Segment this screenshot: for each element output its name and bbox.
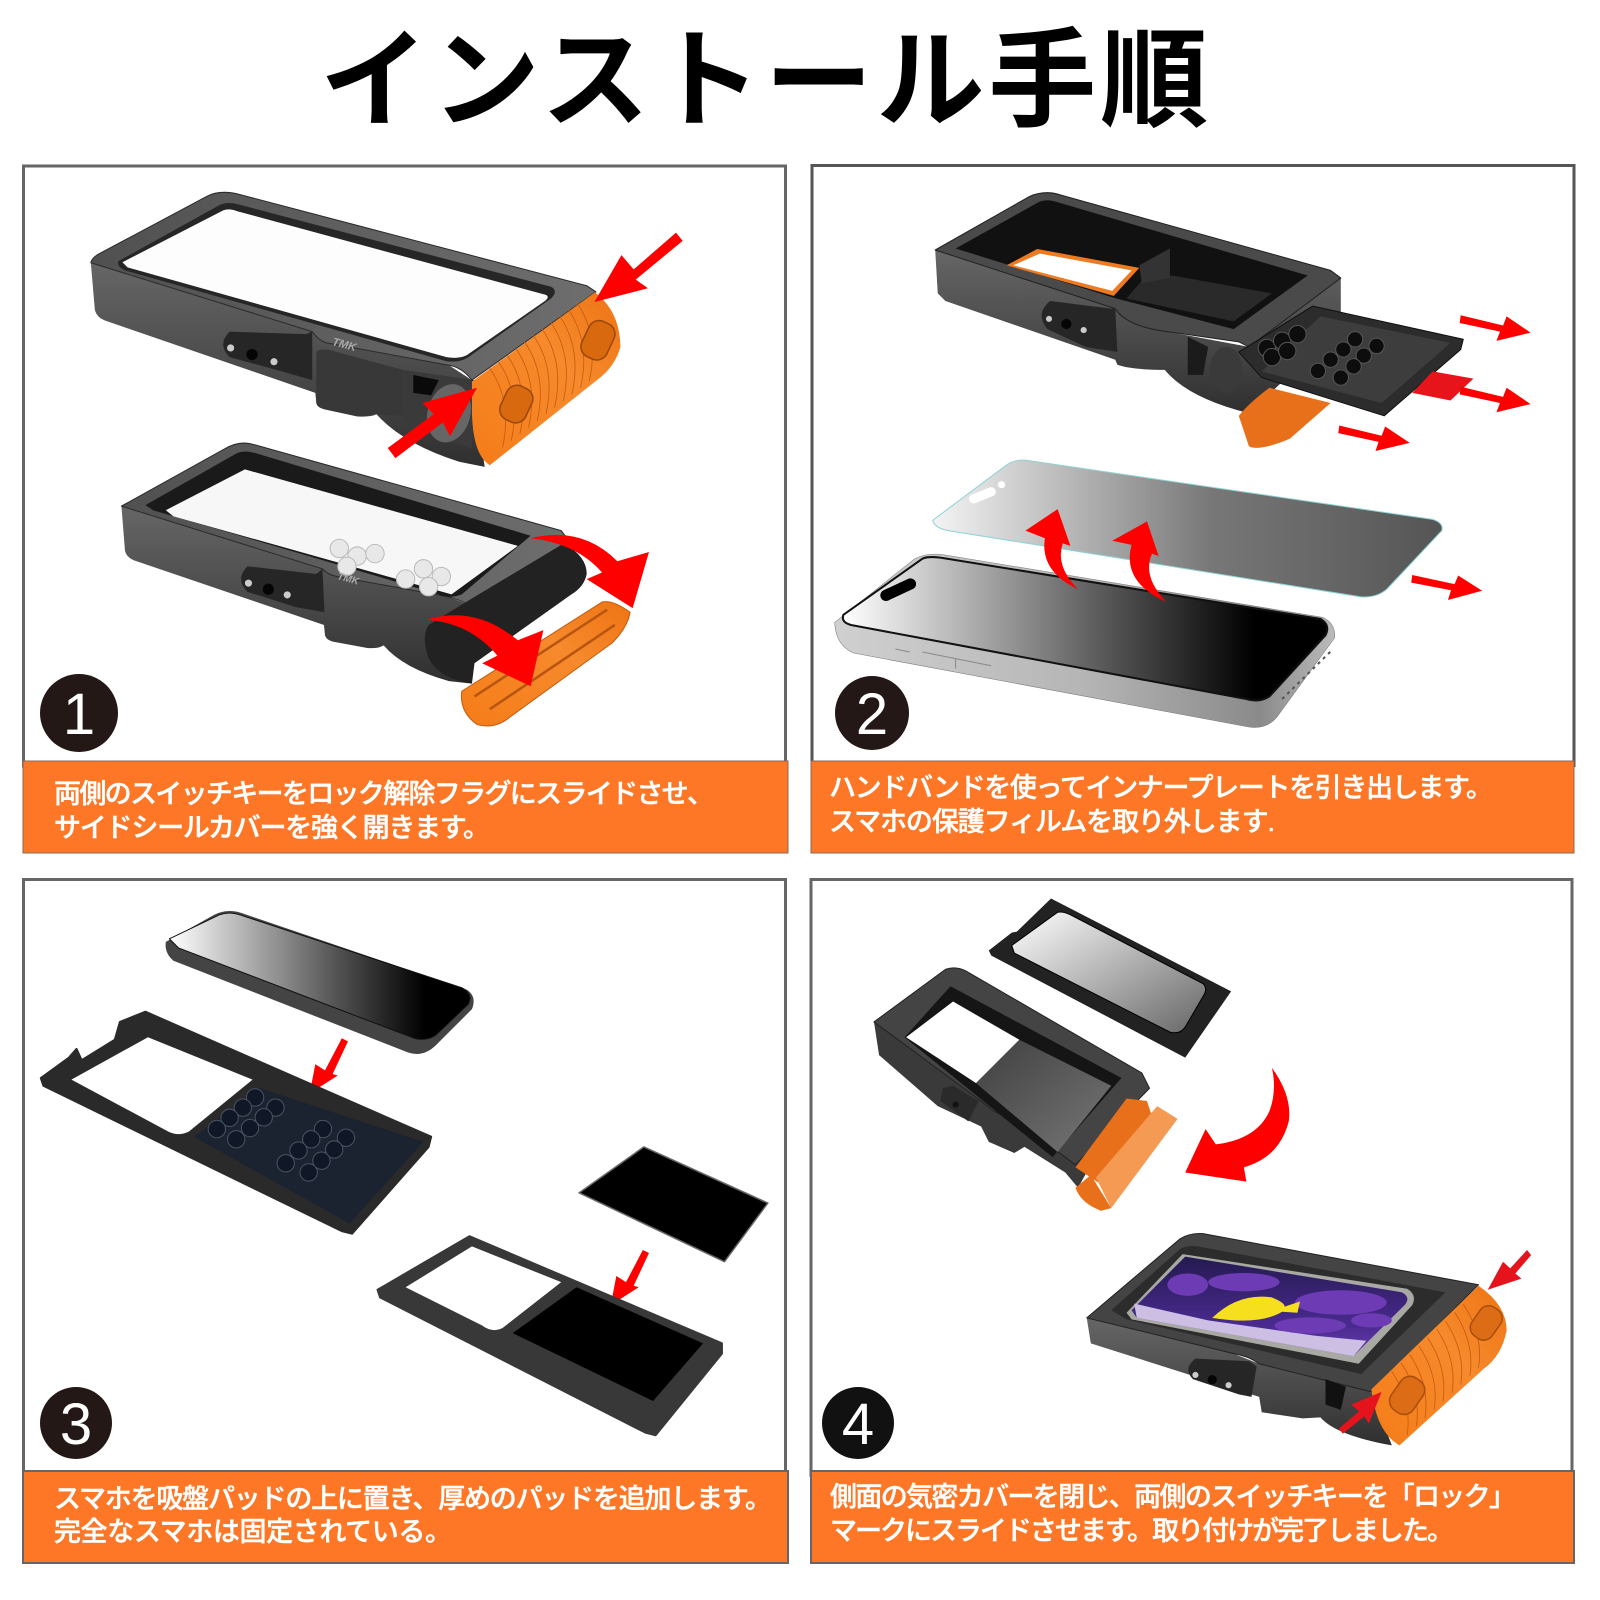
step number 2: 2 <box>856 682 888 747</box>
caption text: ハンドバンドを使ってインナープレートを引き出します。 <box>829 773 1493 803</box>
caption text: マークにスライドさせます。取り付けが完了しました。 <box>830 1516 1454 1546</box>
orange cover <box>472 292 620 465</box>
caption text <box>54 779 714 843</box>
arrow: lock right switch <box>1488 1250 1531 1290</box>
orange open cover <box>461 602 630 726</box>
arrow: film lift right <box>1112 521 1166 602</box>
arrow: lock left switch <box>1339 1392 1382 1434</box>
caption band <box>811 761 1574 853</box>
panel: step 2 <box>811 166 1574 853</box>
caption text: 完全なスマホは固定されている。 <box>54 1517 452 1547</box>
phone <box>166 911 474 1054</box>
step number 1: 1 <box>63 682 95 747</box>
panel: step 3 <box>23 880 788 1563</box>
tripod mount <box>1188 1359 1257 1397</box>
arrow: cover opens lower <box>426 615 543 686</box>
illustration: inner plate and film <box>835 193 1531 727</box>
caption text: サイドシールカバーを強く開きます。 <box>54 813 490 843</box>
caption text <box>54 1484 772 1547</box>
arrow: film slide <box>1411 575 1482 600</box>
orange open cover <box>1076 1098 1178 1211</box>
arrow: cover opens upper <box>531 535 649 608</box>
arrow: press left switch <box>388 388 477 458</box>
step number 4: 4 <box>842 1392 874 1457</box>
tripod mount <box>1042 301 1117 352</box>
caption text: 両側のスイッチキーをロック解除フラグにスライドさせ、 <box>54 779 714 809</box>
suction tray <box>41 1012 431 1234</box>
arrow: close cover <box>1185 1068 1289 1182</box>
caption text: スマホを吸盤パッドの上に置き、厚めのパッドを追加します。 <box>54 1484 772 1514</box>
arrow: slide out lower <box>1338 426 1410 451</box>
step number 2 <box>835 676 909 750</box>
tripod mount <box>223 332 312 380</box>
arrow: place phone <box>310 1038 348 1093</box>
case with opened seal cover <box>121 443 649 726</box>
yellow fish <box>1212 1297 1300 1321</box>
caption text: スマホの保護フィルムを取り外します. <box>829 807 1275 837</box>
arrow: slide out top <box>1460 315 1531 341</box>
brand mark: TMK <box>336 571 361 588</box>
panel: step 1 <box>23 166 788 853</box>
illustration: closing the case <box>874 898 1531 1445</box>
orange cover <box>1371 1286 1507 1445</box>
open case <box>874 968 1178 1211</box>
arrow: place thick pad <box>611 1250 649 1305</box>
tripod mount <box>940 1086 979 1121</box>
assembled case with fish screen <box>1087 1234 1531 1445</box>
title: インストール手順 <box>320 20 1208 141</box>
caption band <box>23 761 788 853</box>
panel: step 4 <box>811 880 1574 1563</box>
step number 1 <box>40 674 118 752</box>
case with sliding tray <box>935 193 1463 448</box>
phone <box>835 554 1335 727</box>
illustration: phone on suction pad and thick pad <box>41 911 768 1435</box>
illustration: closed and opened case <box>91 192 683 726</box>
step number 4 <box>822 1387 894 1459</box>
arrow: press right switch <box>594 233 683 302</box>
brand mark: TMK <box>331 336 358 354</box>
tripod mount <box>241 566 324 612</box>
step number 3: 3 <box>60 1392 92 1457</box>
adapter plate <box>378 1236 722 1435</box>
caption band <box>23 1471 788 1563</box>
case with closed seal cover <box>91 192 683 467</box>
caption band <box>811 1471 1574 1563</box>
caption text <box>830 1482 1516 1546</box>
red hand strap <box>1412 371 1473 401</box>
protective film <box>933 460 1442 597</box>
arrow: slide out middle <box>1460 387 1531 412</box>
step number 3 <box>40 1387 112 1459</box>
thick pad <box>579 1147 768 1262</box>
phone in tray <box>989 898 1231 1058</box>
caption text: 側面の気密カバーを閉じ、両側のスイッチキーを「ロック」 <box>830 1482 1516 1512</box>
caption text <box>829 773 1493 837</box>
arrow: film lift left <box>1026 509 1078 589</box>
